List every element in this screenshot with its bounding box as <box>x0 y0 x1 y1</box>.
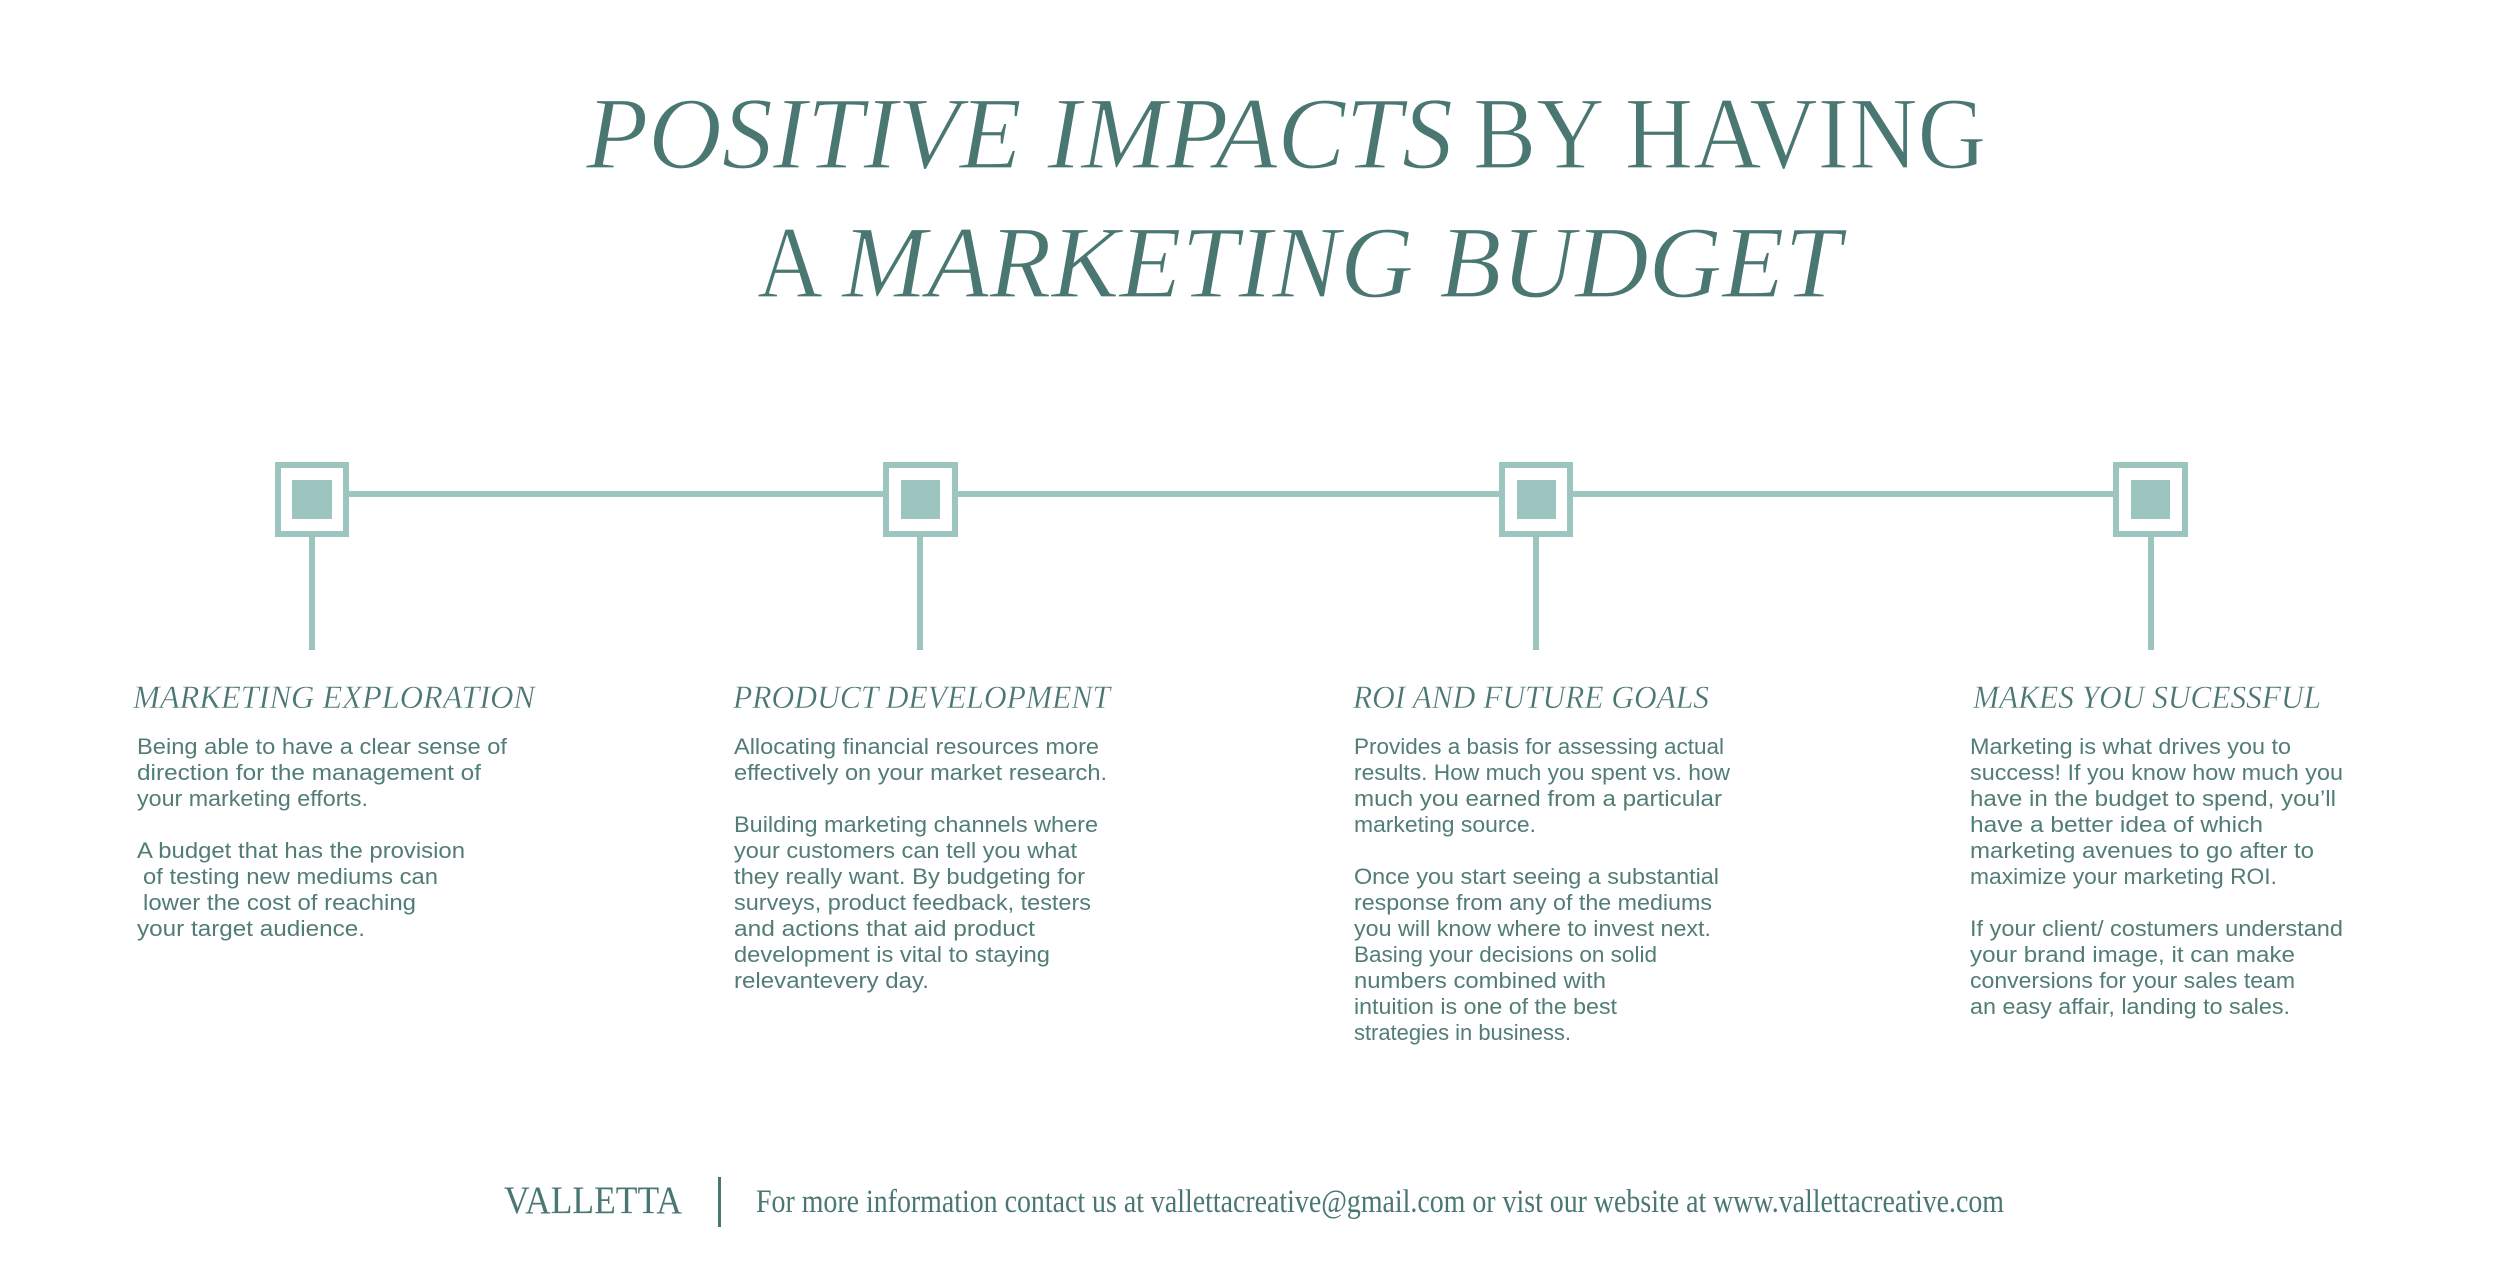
body text: Provides a basis for assessing actual <box>1354 734 1724 759</box>
heading: MAKES YOU SUCESSFUL <box>1972 680 2321 716</box>
body text: response from any of the mediums <box>1354 890 1712 915</box>
body text: and actions that aid product <box>734 916 1036 941</box>
timeline <box>278 465 2185 650</box>
body text: development is vital to staying <box>734 942 1050 967</box>
body text: have a better idea of which <box>1970 812 2263 837</box>
body text: numbers combined with <box>1354 968 1606 993</box>
body text: your brand image, it can make <box>1970 942 2295 967</box>
body text: you will know where to invest next. <box>1354 916 1711 941</box>
heading: ROI AND FUTURE GOALS <box>1352 680 1709 716</box>
body text: marketing source. <box>1354 812 1536 837</box>
body text: marketing avenues to go after to <box>1970 838 2314 863</box>
title: POSITIVE IMPACTS <box>585 77 1453 191</box>
body text: your target audience. <box>137 916 365 941</box>
marker 1 <box>278 465 346 650</box>
body text: relevantevery day. <box>734 968 929 993</box>
marker 2 <box>886 465 955 650</box>
body text: Being able to have a clear sense of <box>137 734 508 759</box>
body text: an easy affair, landing to sales. <box>1970 994 2290 1019</box>
body text: lower the cost of reaching <box>143 890 416 915</box>
marker 4 <box>2116 465 2185 650</box>
body text: surveys, product feedback, testers <box>734 890 1091 915</box>
body text: Building marketing channels where <box>734 812 1098 837</box>
body text: Basing your decisions on solid <box>1354 942 1657 967</box>
heading: MARKETING EXPLORATION <box>132 680 537 716</box>
body text: conversions for your sales team <box>1970 968 2295 993</box>
contact line: For more information contact us at vallettacreative@gmail.com or vist our website at www.vallettacreative.com <box>756 1184 2004 1220</box>
panel: makes you sucessful <box>1970 680 2343 1019</box>
body text: strategies in business. <box>1354 1020 1571 1045</box>
body text: A budget that has the provision <box>137 838 465 863</box>
body text: much you earned from a particular <box>1354 786 1723 811</box>
body text: If your client/ costumers understand <box>1970 916 2343 941</box>
body text: Marketing is what drives you to <box>1970 734 2291 759</box>
body text <box>137 734 508 941</box>
body text: effectively on your market research. <box>734 760 1107 785</box>
body text: success! If you know how much you <box>1970 760 2343 785</box>
body text: of testing new mediums can <box>143 864 438 889</box>
body text: results. How much you spent vs. how <box>1354 760 1731 785</box>
title <box>585 77 1986 320</box>
body text <box>1354 734 1731 1045</box>
brand name: VALLETTA <box>504 1179 682 1222</box>
body text: your marketing efforts. <box>137 786 368 811</box>
body text: direction for the management of <box>137 760 482 785</box>
body text: Once you start seeing a substantial <box>1354 864 1719 889</box>
heading: PRODUCT DEVELOPMENT <box>732 680 1113 716</box>
body text: Allocating financial resources more <box>734 734 1099 759</box>
panel: product development <box>732 680 1113 993</box>
title: BY HAVING <box>1473 77 1986 191</box>
body text: they really want. By budgeting for <box>734 864 1086 889</box>
panel: marketing exploration <box>132 680 537 941</box>
marker 3 <box>1502 465 1570 650</box>
body text: maximize your marketing ROI. <box>1970 864 2277 889</box>
body text: intuition is one of the best <box>1354 994 1618 1019</box>
panel: roi and future goals <box>1352 680 1731 1045</box>
body text: have in the budget to spend, you’ll <box>1970 786 2336 811</box>
body text <box>1970 734 2343 1019</box>
footer <box>504 1177 2004 1227</box>
title: MARKETING BUDGET <box>840 206 1848 320</box>
body text <box>734 734 1107 993</box>
body text: your customers can tell you what <box>734 838 1078 863</box>
title: A <box>757 206 823 320</box>
